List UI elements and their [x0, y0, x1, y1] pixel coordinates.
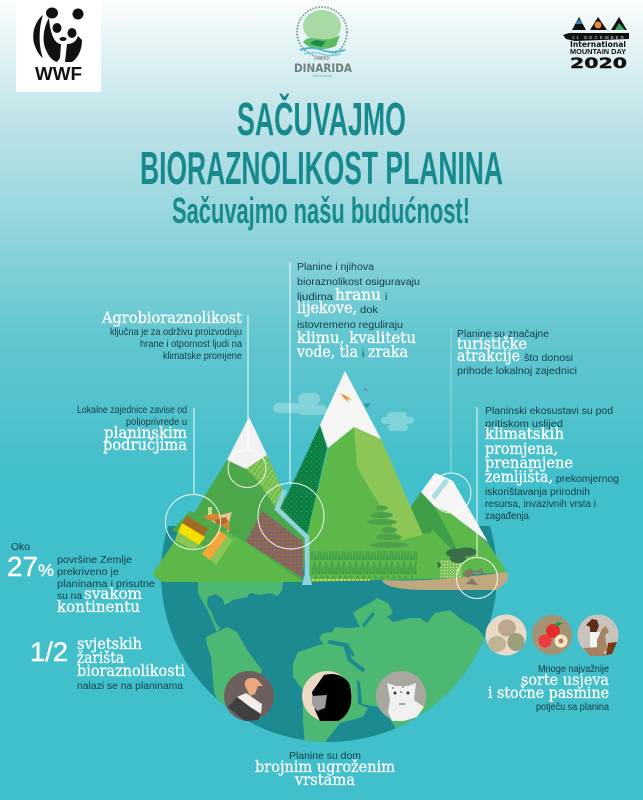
title: [140, 93, 503, 231]
text: pressures on ecosystems: [485, 406, 619, 522]
right mountain: [382, 473, 508, 590]
inland seas: [330, 614, 373, 670]
icon: potatoes: [486, 614, 526, 656]
mountain body: [153, 455, 307, 582]
rocks and shrubs: [423, 548, 484, 585]
text: pressures on ecosystems: resursa, invazivnih vrsta i: [485, 499, 596, 510]
text: pressures on ecosystems: promjena,: [485, 440, 558, 458]
text: food and medicine: bioraznolikost osiguravaju: [297, 277, 420, 288]
text: food and medicine: i: [362, 349, 364, 360]
stat: 27 percent: [7, 542, 155, 616]
stat: one half: 1/2: [30, 637, 68, 667]
terraces: [367, 506, 408, 548]
light slope: [354, 427, 423, 540]
continents: [198, 582, 484, 742]
text: crops and breeds: Mnoge najvažnije: [538, 664, 609, 675]
logo: WWF panda: [16, 0, 101, 92]
logo: Parkovi Dinarida: [294, 7, 352, 78]
stat: 27 percent: su na: [57, 591, 82, 602]
text: endangered species: vrstama: [294, 771, 355, 789]
text: food and medicine: istovremeno reguliraju: [297, 320, 403, 331]
text: food and medicine: ljudima: [297, 292, 333, 303]
stat: one half: bioraznolikosti: [77, 662, 185, 680]
text: agrobiodiversity: Agrobioraznolikost: [101, 309, 243, 327]
left mountain: [153, 417, 307, 582]
text: endangered species: brojnim ugroženim: [255, 758, 395, 776]
stat: one half: žarišta: [77, 649, 124, 667]
text: pressures on ecosystems: pritiskom uslijed: [485, 419, 563, 430]
mountain body: [307, 427, 440, 582]
text: food and medicine: dok: [360, 305, 379, 316]
stat: one half: [30, 635, 185, 692]
text: food and medicine: lijekove,: [297, 299, 357, 317]
logo wordmark: WWF: WWF: [35, 64, 82, 84]
snow cap: [227, 417, 267, 469]
stat: 27 percent: površine Zemlje: [57, 555, 132, 566]
text: pressures on ecosystems: zemljišta,: [485, 468, 553, 486]
stat: 27 percent: 27: [7, 551, 38, 582]
text: crops and breeds: potječu sa planina: [536, 702, 609, 713]
text: pressures on ecosystems: zagađenja: [485, 511, 529, 522]
icon: apples: [532, 615, 572, 655]
logo: International Mountain Day 2020: 11 DECEMBER: [572, 35, 625, 40]
logo wordmark: Dinarida: DINARIDA: [294, 61, 352, 75]
stat: 27 percent: prekriveno je: [57, 567, 119, 578]
clouds: [273, 393, 414, 431]
stat: 27 percent: planinama i prisutne: [57, 579, 155, 590]
grass patch: [440, 560, 462, 578]
birds: [340, 388, 371, 408]
text: endangered species: Planine su dom: [289, 751, 361, 762]
crop field: [311, 551, 417, 579]
waterfall: [277, 490, 307, 578]
icon: alpacas: [578, 614, 618, 656]
text: crops and breeds: sorte usjeva: [521, 671, 609, 689]
text: agrobiodiversity: klimatske promjene: [163, 351, 242, 362]
text: food and medicine: Planine i njihova: [297, 262, 374, 273]
logo: International Mountain Day 2020: 2020: [570, 56, 627, 72]
text: agrobiodiversity: ključna je za održivu proizvodnju: [110, 327, 242, 338]
text: food and medicine: i: [385, 292, 387, 303]
text: pressures on ecosystems: iskorištavanja prirodnih: [485, 487, 590, 498]
text: crops and breeds: [488, 664, 609, 713]
text: food and medicine: zraka: [368, 343, 408, 361]
ploughed field: [246, 511, 303, 578]
callout circles and leader lines: [166, 262, 498, 598]
foreground slope: [385, 530, 470, 580]
text: food and medicine: klimu, kvalitetu: [297, 329, 416, 347]
globe: [161, 526, 496, 742]
text: tourism: Planine su značajne: [457, 329, 549, 340]
logo: Parkovi Dinarida: wild.dinarida: [312, 74, 332, 78]
stat: one half: nalazi se na planinama: [77, 681, 183, 692]
text: food and medicine: vode, tla: [296, 343, 358, 361]
stat: 27 percent: %: [38, 561, 54, 580]
stat: 27 percent: Oko: [11, 542, 30, 553]
text: pressures on ecosystems: prenamjene: [485, 454, 573, 472]
text: local communities: [77, 405, 187, 454]
logo: Parkovi Dinarida: PARKOVI: [314, 57, 330, 61]
snow caps: [421, 473, 488, 542]
logo: International Mountain Day 2020: MOUNTAIN DAY: [570, 47, 626, 56]
dark slope: [400, 492, 505, 572]
text: food and medicine: hranu: [335, 286, 381, 304]
text: local communities: planinskim: [104, 424, 187, 442]
text: agrobiodiversity: hrane i otpornost ljudi na: [140, 339, 242, 350]
stat: 27 percent: svakom: [84, 585, 142, 603]
portrait: gorilla: [302, 671, 352, 721]
text: crops and breeds: i stočne pasmine: [488, 684, 609, 702]
foreground slope: [153, 514, 303, 582]
text: tourism: [457, 329, 577, 377]
stat: one half: svjetskih: [77, 635, 142, 653]
text: food and medicine: [296, 262, 420, 361]
text: endangered species: [255, 751, 395, 789]
sand shore: [382, 572, 508, 590]
portrait: snow leopard: [376, 671, 426, 721]
dark forest slope: [281, 425, 327, 535]
text: pressures on ecosystems: prekomjernog: [556, 474, 619, 485]
text: local communities: Lokalne zajednice zavise od: [77, 405, 187, 416]
logo: International Mountain Day 2020: International: [570, 40, 626, 49]
village: [204, 507, 232, 532]
portrait: vulture: [224, 671, 274, 721]
text: local communities: poljoprivrede u: [126, 417, 187, 428]
logo: International Mountain Day 2020: [563, 17, 629, 72]
middle mountain: [277, 371, 440, 585]
terraced fields: [172, 511, 233, 565]
stat: 27 percent: kontinentu: [57, 598, 140, 616]
hatched slope: [246, 455, 284, 508]
text: tourism: atrakcije: [457, 347, 520, 365]
text: pressures on ecosystems: klimatskih: [485, 425, 564, 443]
yellow flowers: [312, 579, 370, 581]
text: pressures on ecosystems: Planinski ekosustavi su pod: [485, 406, 613, 417]
right light slope: [435, 507, 507, 575]
snow cap: [320, 371, 381, 448]
text: tourism: što donosi: [524, 353, 573, 364]
text: agrobiodiversity: [101, 309, 243, 362]
text: local communities: područjima: [103, 436, 187, 454]
text: tourism: prihode lokalnoj zajednici: [457, 366, 577, 377]
title: SAČUVAJMO: [237, 93, 406, 145]
text: tourism: turističke: [457, 335, 527, 353]
